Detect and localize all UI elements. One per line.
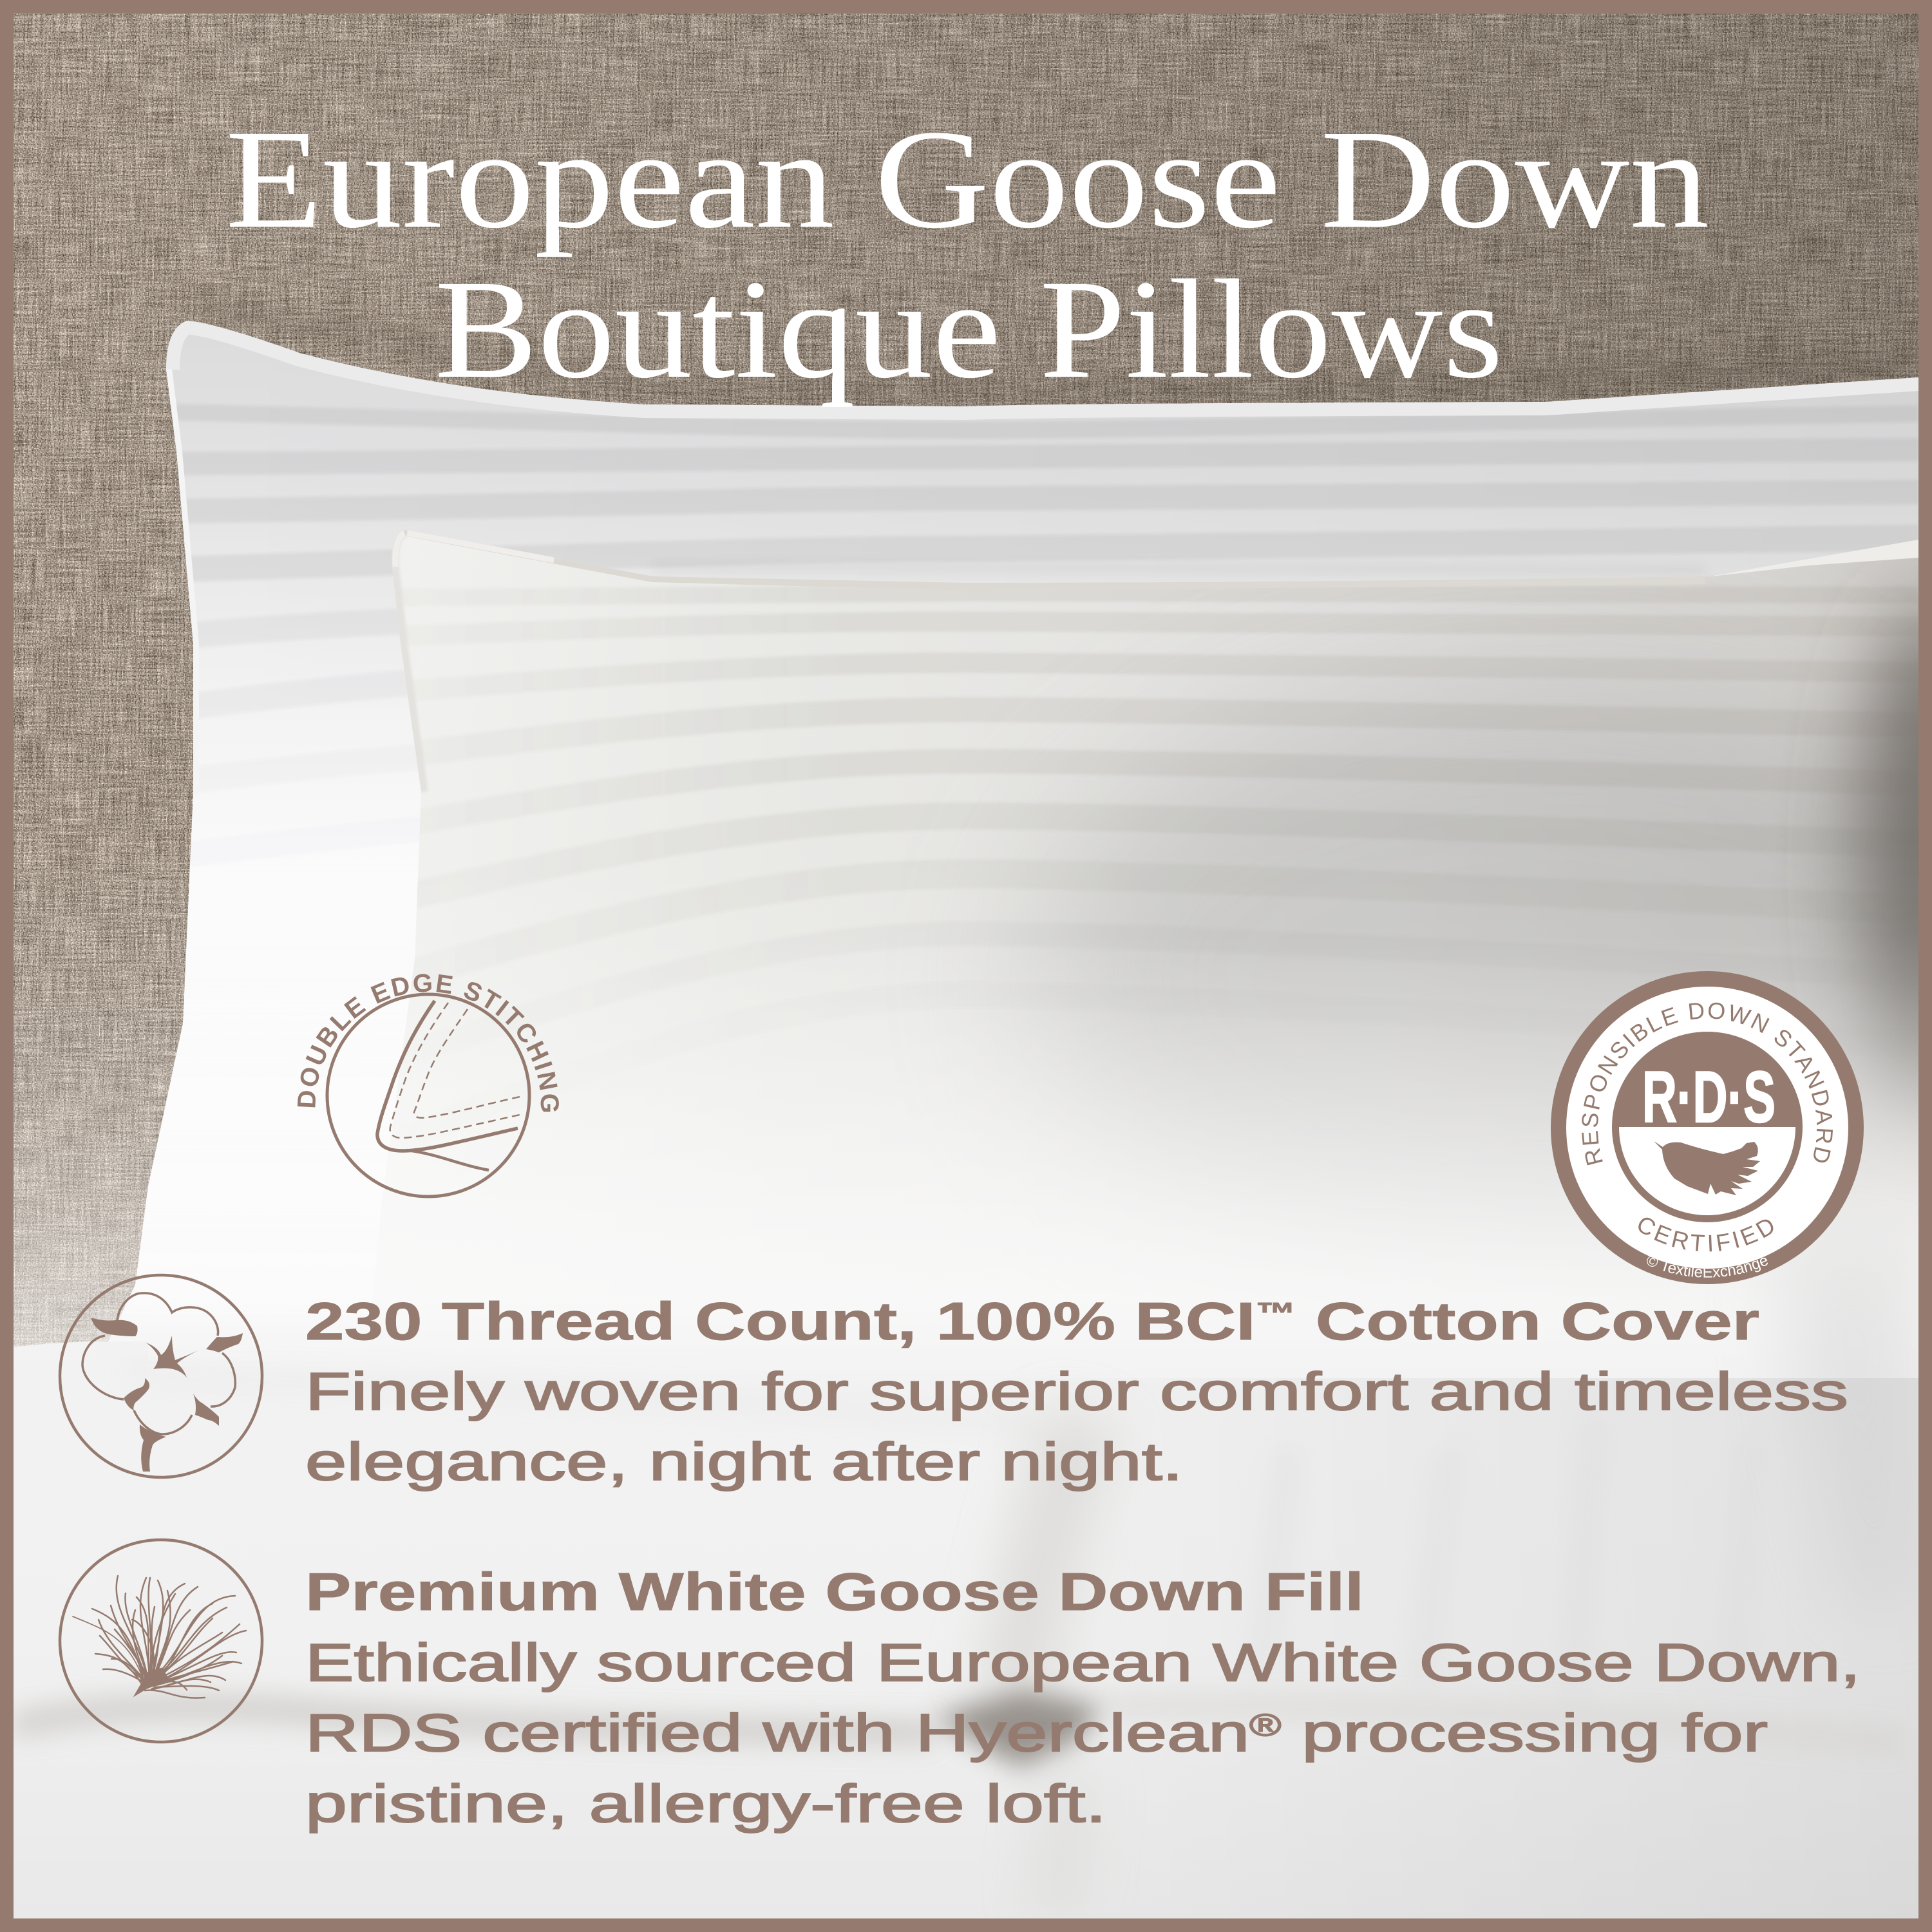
seal inner disc	[1612, 1032, 1803, 1222]
right piping line	[1705, 540, 1918, 577]
feature 2 description: processing for	[1281, 1703, 1768, 1763]
front pillow piping	[392, 530, 421, 792]
curved label: DOUBLE EDGE STITCHING	[298, 974, 559, 1112]
duvet	[0, 1256, 1932, 1932]
feature 1 description: elegance, night after night.	[305, 1432, 1183, 1492]
linen wall	[0, 0, 1932, 1385]
icon: responsible down standard seal	[1551, 971, 1864, 1284]
feature: thread count and cotton cover	[305, 1291, 1848, 1492]
feature 2 description: Ethically sourced European White Goose Down,	[305, 1633, 1861, 1692]
wall shadow above pillow	[193, 306, 1918, 393]
back pillow	[108, 321, 1918, 1341]
feature 2 description: RDS certified with Hyerclean	[305, 1703, 985, 1763]
feature 2 description: pristine, allergy-free loft.	[305, 1774, 1106, 1833]
front pillow	[392, 530, 1918, 1288]
white fade overlay	[0, 837, 1932, 1430]
title line 2: Boutique Pillows	[435, 251, 1503, 408]
seal initials: R·D·S	[1642, 1057, 1776, 1137]
seal outer ring	[1551, 971, 1864, 1284]
cotton lobes	[82, 1293, 235, 1434]
seal lower half	[1619, 1127, 1795, 1215]
title line 1: European Goose Down	[225, 100, 1709, 258]
feature 2 description: ®	[1249, 1709, 1281, 1743]
feature 1 heading: 230 Thread Count, 100% BCI	[305, 1291, 1030, 1351]
feature 1 description: Finely woven for superior comfort and timeless	[305, 1361, 1848, 1421]
cotton sepals	[91, 1318, 243, 1472]
seal feather	[1654, 1141, 1760, 1195]
feature 1 heading: Cotton Cover	[1296, 1291, 1759, 1351]
icon: down cluster	[60, 1540, 262, 1742]
feature 1 heading: ™	[1256, 1297, 1296, 1331]
icon: cotton boll	[60, 1275, 262, 1477]
pillow edge drawing	[377, 1001, 523, 1170]
seal ring text: RESPONSIBLE DOWN STANDARD	[1582, 1002, 1833, 1166]
seal certified text: CERTIFIED	[1632, 1210, 1783, 1257]
front pillow shadow	[653, 567, 1705, 570]
feature 2 heading: Premium White Goose Down Fill	[305, 1562, 1364, 1622]
down circle	[60, 1540, 262, 1742]
pillow white fade	[84, 934, 1932, 1436]
seal copyright: © TextileExchange	[1643, 1251, 1771, 1282]
stitching circle	[327, 994, 529, 1197]
feature 1 description	[305, 1361, 1848, 1492]
feature: white goose down fill	[305, 1562, 1861, 1833]
seal white ring	[1566, 987, 1848, 1269]
wall shading	[0, 0, 1932, 837]
title	[225, 100, 1709, 408]
feature 2 description	[305, 1633, 1861, 1833]
icon: double edge stitching badge	[292, 969, 564, 1197]
left corner piping highlight	[395, 533, 554, 567]
cotton circle	[60, 1275, 262, 1477]
down fibres	[73, 1576, 246, 1698]
